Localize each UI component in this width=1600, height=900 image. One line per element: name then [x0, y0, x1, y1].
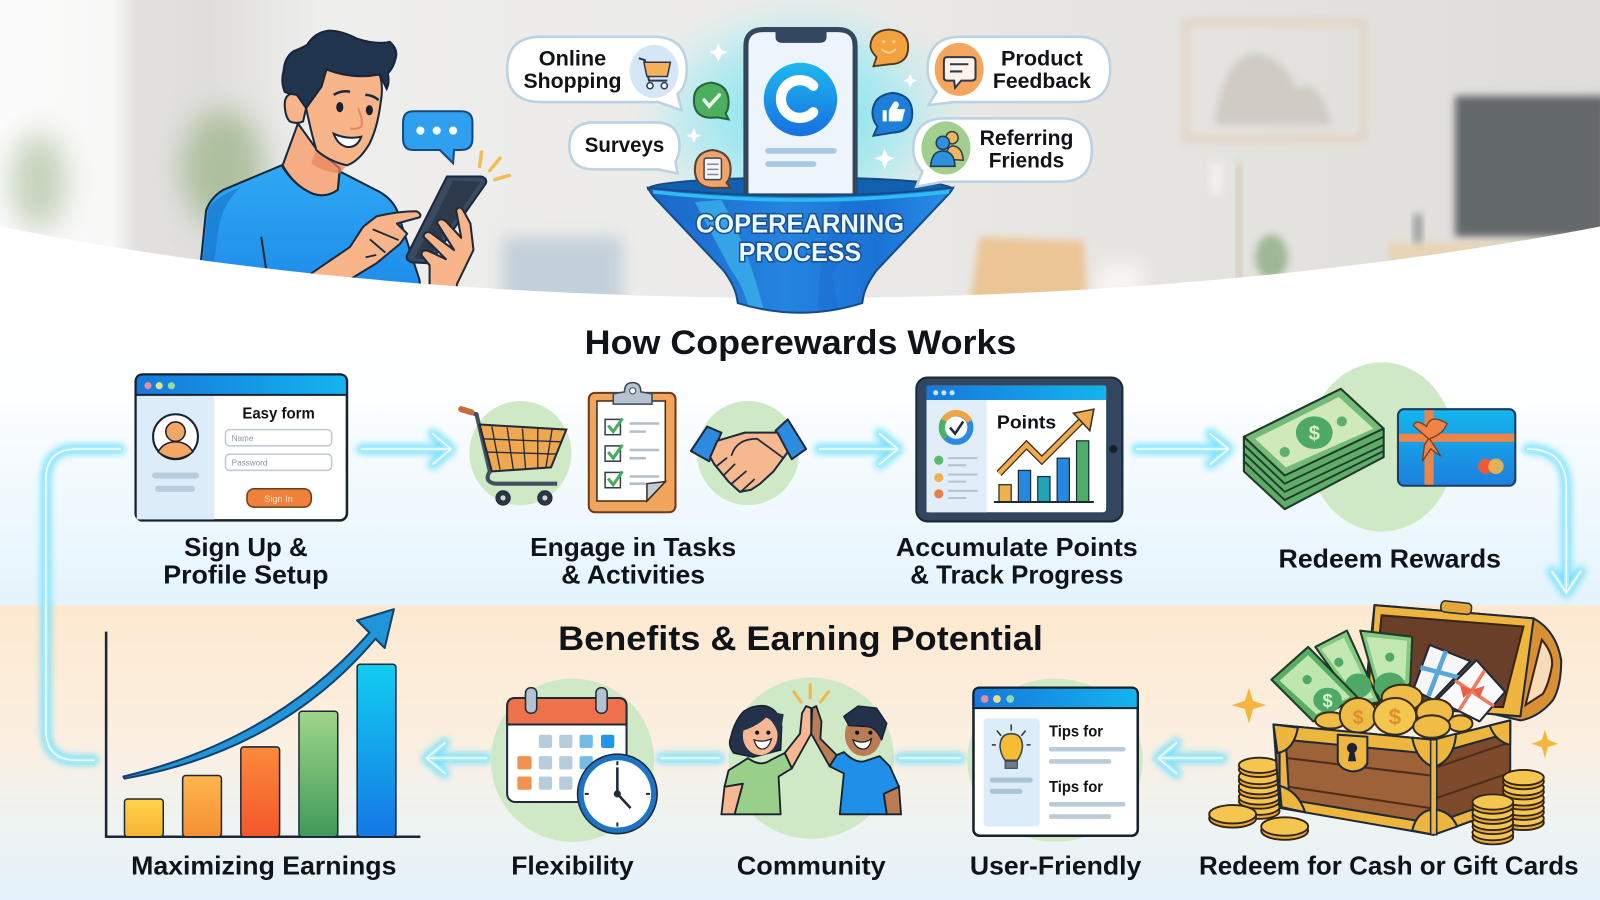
man: [811, 706, 901, 814]
treasure chest: [1209, 600, 1561, 844]
icon: green check bubble: [694, 83, 729, 119]
icon: smiley bubble: [870, 30, 908, 66]
bubble: online shopping: Shopping: [523, 69, 621, 93]
eyes and smile: [334, 91, 379, 147]
step 2: clipboard icon: [589, 383, 676, 512]
bubble: product feedback: Product: [1001, 46, 1083, 70]
sparkles: [687, 43, 917, 169]
dash connector: community to flexibility: [661, 753, 719, 763]
left coin stack: [1239, 758, 1280, 819]
phone in hand: [407, 177, 486, 263]
icon: thumbs up bubble: [872, 93, 912, 136]
bubble: surveys: Surveys: [585, 133, 664, 157]
treasure chest: $: [1322, 690, 1333, 711]
chat bubble: [403, 111, 472, 163]
coins in chest: [1315, 685, 1472, 738]
step 3: points tablet: [916, 378, 1122, 521]
funnel and phone: PROCESS: [739, 239, 861, 267]
funnel body: [648, 188, 953, 313]
holding hand: [421, 208, 473, 296]
step 2 label: [530, 534, 736, 590]
icon: cart: [630, 45, 679, 98]
step 3 label: & Track Progress: [910, 562, 1123, 590]
shirt: [201, 165, 422, 301]
step 2 label: Engage in Tasks: [530, 534, 736, 562]
heading: benefits and earning potential: Benefits & Earning Potential: [558, 620, 1043, 658]
funnel title: COPEREARNING: [696, 211, 904, 239]
step 3 label: [896, 534, 1138, 590]
illustration: man using phone: [201, 31, 509, 301]
funnel back rim: [648, 178, 952, 200]
label: redeem for cash or gift cards: Redeem for Cash or Gift Cards: [1199, 852, 1579, 880]
label: community: Community: [737, 852, 887, 880]
step 4: cash stack and gift card: [1244, 362, 1515, 532]
hero background: blurred living room: [0, 0, 1600, 308]
step 2: handshake icon: [691, 401, 806, 505]
treasure chest: $: [1389, 704, 1402, 729]
label: flexibility: Flexibility: [511, 852, 635, 880]
face: [306, 69, 382, 165]
hair: [282, 31, 396, 108]
step 2: shopping cart icon: [461, 401, 571, 505]
icon: clipboard bubble: [695, 150, 731, 188]
bubble: referring friends: [913, 118, 1092, 187]
step 3: points tablet: Points: [997, 412, 1056, 433]
step 4: cash stack and gift card: $: [1309, 423, 1321, 445]
bubble: online shopping: [507, 37, 687, 110]
lower page background: [0, 286, 1600, 612]
bubble: referring friends: Referring: [980, 126, 1073, 150]
phone body: [746, 30, 855, 196]
heading: how coperewards works: How Coperewards Works: [585, 324, 1016, 362]
bubble: product feedback: [928, 37, 1110, 105]
ear: [285, 94, 306, 123]
step 1: sign up window: [136, 374, 347, 520]
coin stacks: [1209, 770, 1544, 844]
treasure chest: $: [1353, 706, 1364, 728]
dash connector: user-friendly to community: [900, 753, 960, 763]
step 1: sign up window: Name: [232, 434, 254, 443]
arrow: chest to user-friendly: [1158, 743, 1222, 773]
bubble: surveys: [569, 122, 680, 173]
user-friendly icon: tips window: Tips for: [1049, 724, 1103, 741]
user-friendly icon: tips window: [967, 679, 1143, 842]
growth arrow: [123, 609, 394, 779]
bubble: online shopping: Online: [539, 46, 606, 70]
step 1: sign up window: Easy form: [242, 405, 315, 422]
step 4 label: Redeem Rewards: [1279, 545, 1501, 573]
community icon: two people high five: [721, 678, 901, 839]
loop arrow: right connector: [1528, 449, 1581, 593]
step 1: sign up window: Sign In: [264, 494, 293, 504]
curved white divider: [0, 227, 1600, 337]
label: maximizing earnings: Maximizing Earnings: [131, 852, 396, 880]
step 3 label: Accumulate Points: [896, 534, 1138, 562]
cash notes: [1271, 631, 1412, 721]
chest body: [1273, 720, 1510, 835]
arrow: step 1 to 2: [361, 434, 451, 464]
arrow: step 2 to 3: [819, 434, 898, 464]
loop arrow: left connector: [46, 449, 120, 760]
bubble: referring friends: Friends: [989, 148, 1064, 172]
step 1 label: Sign Up &: [184, 534, 308, 562]
forearm and pointing hand: [306, 211, 420, 291]
neck: [283, 123, 340, 195]
step 1: sign up window: Password: [232, 458, 268, 467]
label: user-friendly: User-Friendly: [970, 852, 1142, 880]
gold sparkles: [1232, 688, 1558, 758]
bar chart: maximizing earnings: [106, 609, 420, 837]
funnel and phone: [621, 0, 979, 313]
arrow: flexibility to chart: [427, 743, 487, 773]
flexibility icon: calendar and clock: [491, 679, 657, 842]
user-friendly icon: tips window: Tips for: [1049, 779, 1103, 796]
step 2 label: & Activities: [561, 562, 705, 590]
gift cards: [1413, 645, 1505, 721]
step 1 label: [163, 534, 329, 590]
notification sparks: [480, 152, 509, 180]
bubble: product feedback: Feedback: [993, 69, 1091, 93]
cyan glow: [621, 0, 979, 245]
arrow: step 3 to 4: [1137, 434, 1229, 464]
clock: [578, 754, 657, 834]
step 1 label: Profile Setup: [163, 562, 329, 590]
gift card: [1398, 409, 1515, 486]
chest lid: [1367, 600, 1561, 720]
woman: [721, 706, 811, 814]
benefits band background: [0, 605, 1600, 900]
